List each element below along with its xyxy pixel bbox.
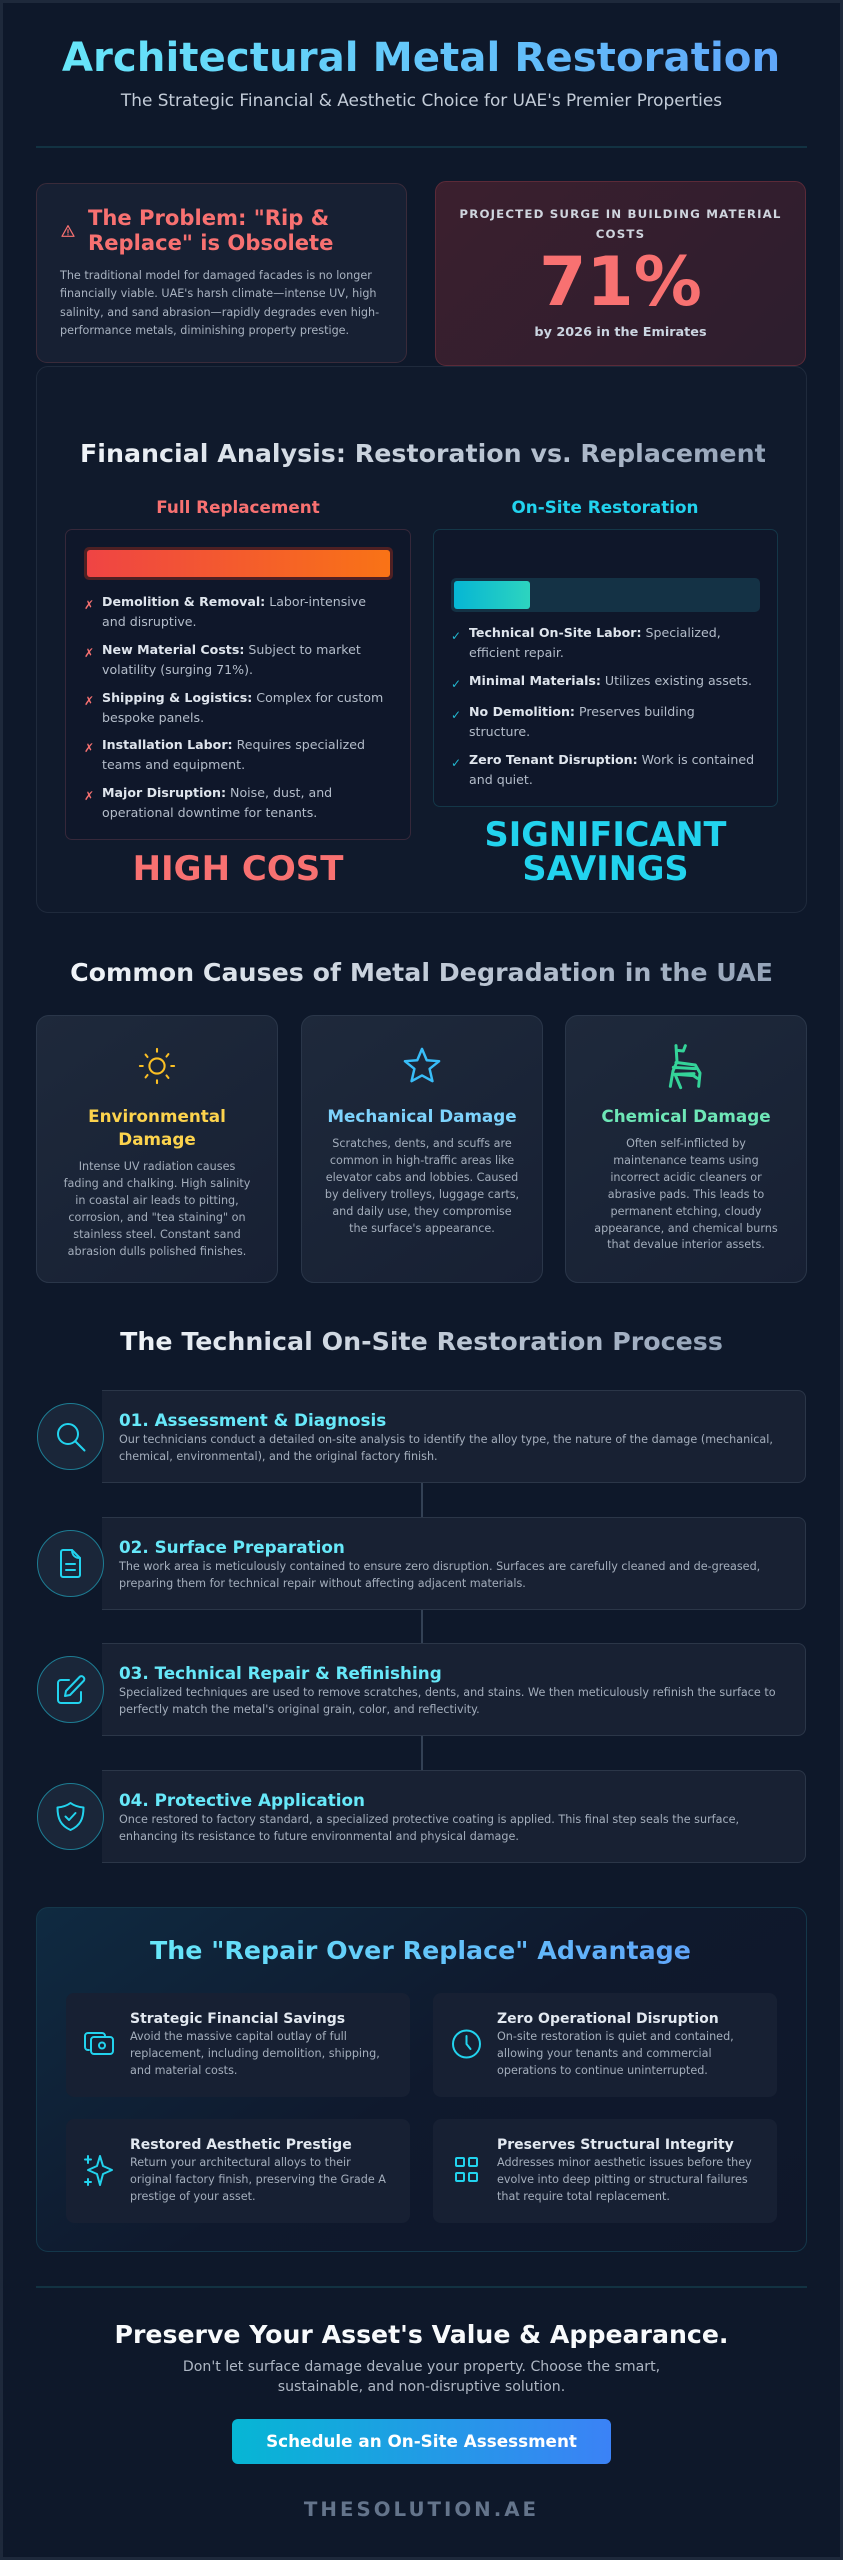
icon: sparkles xyxy=(84,2155,113,2186)
advantage: structural integrity xyxy=(433,2119,777,2223)
step 4 text: Once restored to factory standard, a specialized protective coating is applied. This final step seals the surface, xyxy=(119,1813,739,1826)
item: new material xyxy=(102,642,361,677)
heading: restoration process: The Technical On-Site Restoration Process xyxy=(120,1327,723,1356)
cost bar fill xyxy=(87,550,390,577)
advantage title: Restored Aesthetic Prestige xyxy=(130,2137,352,2153)
card text xyxy=(325,1137,519,1235)
mark: ✓ xyxy=(451,629,461,643)
call to action button xyxy=(232,2419,611,2464)
savings list xyxy=(451,625,754,787)
card text: Intense UV radiation causes xyxy=(79,1160,235,1173)
mark: ✗ xyxy=(84,789,94,803)
item: demolition: and disruptive. xyxy=(102,614,197,629)
advantage text: operations to continue uninterrupted. xyxy=(497,2064,708,2077)
icon: sun xyxy=(138,1048,176,1084)
item: shipping xyxy=(102,690,383,725)
panel: the problem xyxy=(36,183,407,363)
item: materials: Minimal Materials: Utilizes existing assets. xyxy=(469,673,752,688)
card text: by delivery trolleys, luggage carts, xyxy=(325,1188,519,1201)
advantage text: Addresses minor aesthetic issues before they xyxy=(497,2156,752,2169)
item: demolition: structure. xyxy=(469,724,530,739)
card text: that devalue interior assets. xyxy=(607,1238,765,1251)
mark: ✓ xyxy=(451,708,461,722)
card text: and daily use, they compromise xyxy=(332,1205,512,1218)
step 2 text xyxy=(118,1560,760,1590)
card text: appearance, and chemical burns xyxy=(594,1222,778,1235)
stat note: by 2026 in the Emirates xyxy=(534,325,707,340)
step 3 text xyxy=(119,1686,776,1716)
advantage: financial savings xyxy=(66,1993,410,2097)
advantage text: allowing your tenants and commercial xyxy=(497,2047,712,2060)
card text: abrasion dulls polished finishes. xyxy=(68,1245,246,1258)
step 1 text xyxy=(119,1433,773,1463)
step 2 text: The work area is meticulously contained to ensure zero disruption. Surfaces are carefully cleaned and de-greased, xyxy=(119,1560,760,1573)
brand name: THESOLUTION.AE xyxy=(304,2498,539,2521)
card text: common in high-traffic areas like xyxy=(330,1154,514,1167)
advantage title: Strategic Financial Savings xyxy=(130,2011,345,2027)
advantage title: Preserves Structural Integrity xyxy=(497,2137,734,2153)
icon: warning triangle xyxy=(61,225,75,237)
cost list xyxy=(84,594,383,820)
card text: fading and chalking. High salinity xyxy=(64,1177,250,1190)
call to action button: Schedule an On-Site Assessment xyxy=(266,2431,577,2451)
item: new material: New Material Costs: Subject to market xyxy=(102,642,361,657)
heading: the problem: Replace" is Obsolete xyxy=(88,230,333,255)
card text: permanent etching, cloudy xyxy=(610,1205,762,1218)
verdict: significant savings: SIGNIFICANT xyxy=(485,815,726,854)
card text: abrasive pads. This leads to xyxy=(608,1188,764,1201)
column title: on-site restoration: On-Site Restoration xyxy=(512,497,698,517)
problem description: financially viable. UAE's harsh climate—intense UV, high xyxy=(60,287,377,300)
card: chemical damage xyxy=(565,1015,807,1283)
advantage text: evolve into deep pitting or structural failures xyxy=(497,2173,748,2186)
advantage text xyxy=(130,2030,380,2077)
step 1 box xyxy=(102,1390,806,1483)
mark: ✗ xyxy=(84,694,94,708)
step 2 box xyxy=(102,1517,806,1610)
problem description: salinity, and sand abrasion—rapidly degrades even high- xyxy=(60,306,379,319)
card title: Chemical Damage xyxy=(601,1106,771,1126)
cost bar: full xyxy=(84,547,393,580)
item: shipping: Shipping & Logistics: Complex for custom xyxy=(102,690,383,705)
item: disruption: operational downtime for tenants. xyxy=(102,805,317,820)
heading: the problem: The Problem: "Rip & xyxy=(88,205,329,230)
item: demolition xyxy=(102,594,366,629)
step 3 text: perfectly match the metal's original grain, color, and reflectivity. xyxy=(119,1703,480,1716)
cost bar fill xyxy=(454,581,530,609)
item: shipping: bespoke panels. xyxy=(102,710,204,725)
heading: the problem xyxy=(88,205,333,255)
item: installation: Installation Labor: Requires specialized xyxy=(102,737,365,752)
verdict: significant savings xyxy=(485,815,726,888)
card text: maintenance teams using xyxy=(613,1154,759,1167)
item: tenant xyxy=(469,752,754,787)
item: installation xyxy=(102,737,365,772)
problem description: performance metals, diminishing property prestige. xyxy=(60,324,349,337)
advantage text: prestige of your asset. xyxy=(130,2190,256,2203)
mark: ✗ xyxy=(84,646,94,660)
subtitle: The Strategic Financial & Aesthetic Choice for UAE's Premier Properties xyxy=(121,90,722,110)
item: disruption: Major Disruption: Noise, dust, and xyxy=(102,785,332,800)
footer text xyxy=(183,2359,660,2394)
panel: financial analysis xyxy=(36,366,807,913)
step 1 title: 01. Assessment & Diagnosis xyxy=(119,1410,386,1430)
advantage text xyxy=(497,2030,734,2077)
item: labor xyxy=(469,625,721,660)
advantage text: replacement, including demolition, shipping, xyxy=(130,2047,380,2060)
column: full replacement xyxy=(65,529,411,840)
mark: ✓ xyxy=(451,756,461,770)
step 2 title: 02. Surface Preparation xyxy=(119,1537,345,1557)
step 3 text: Specialized techniques are used to remove scratches, dents, and stains. We then meticulously refinish the surface to xyxy=(119,1686,776,1699)
card title: Mechanical Damage xyxy=(327,1106,517,1126)
advantage text xyxy=(497,2156,752,2203)
icon: squares grid xyxy=(455,2157,478,2182)
item: installation: teams and equipment. xyxy=(102,757,245,772)
card title: Environmental xyxy=(88,1106,226,1126)
step 1 text: Our technicians conduct a detailed on-site analysis to identify the alloy type, the nature of the damage (mechanical, xyxy=(119,1433,773,1446)
heading: advantage: The "Repair Over Replace" Advantage xyxy=(150,1936,691,1965)
advantage: aesthetic prestige xyxy=(66,2119,410,2223)
advantage text: On-site restoration is quiet and contained, xyxy=(497,2030,734,2043)
advantage text: Avoid the massive capital outlay of full xyxy=(130,2030,347,2043)
item: labor: efficient repair. xyxy=(469,645,564,660)
column title: full replacement: Full Replacement xyxy=(156,497,320,517)
verdict: high cost: HIGH COST xyxy=(133,849,343,889)
icon: shield check xyxy=(37,1783,104,1850)
advantage text: Return your architectural alloys to their xyxy=(130,2156,351,2169)
advantage text: that require total replacement. xyxy=(497,2190,670,2203)
step 4 text xyxy=(119,1813,739,1843)
item: labor: Technical On-Site Labor: Specialized, xyxy=(469,625,721,640)
item: demolition: Demolition & Removal: Labor-intensive xyxy=(102,594,366,609)
card: environmental damage xyxy=(36,1015,278,1283)
advantage text: and material costs. xyxy=(130,2064,237,2077)
mark: ✗ xyxy=(84,741,94,755)
item: disruption xyxy=(102,785,332,820)
step 2 text: preparing them for technical repair without affecting adjacent materials. xyxy=(119,1577,526,1590)
item: demolition xyxy=(469,704,695,739)
footer text: sustainable, and non-disruptive solution. xyxy=(278,2378,565,2394)
advantage: zero disruption xyxy=(433,1993,777,2097)
step 4 box xyxy=(102,1770,806,1863)
stat label: PROJECTED SURGE IN BUILDING MATERIAL xyxy=(459,207,782,221)
icon: clock xyxy=(452,2030,481,2058)
card text: Scratches, dents, and scuffs are xyxy=(332,1137,512,1150)
column: on-site restoration xyxy=(433,529,778,807)
footer text: Don't let surface damage devalue your property. Choose the smart, xyxy=(183,2359,660,2375)
verdict: significant savings: SAVINGS xyxy=(522,849,689,888)
step 4 text: enhancing its resistance to future environmental and physical damage. xyxy=(119,1830,519,1843)
card text: the surface's appearance. xyxy=(349,1222,495,1235)
panel: repair over replace advantage xyxy=(36,1907,807,2252)
icon: chemical glyph xyxy=(668,1044,702,1090)
icon: cash xyxy=(84,2032,114,2055)
icon: pencil square xyxy=(37,1656,104,1723)
card title: Damage xyxy=(118,1129,196,1149)
card: mechanical damage xyxy=(301,1015,543,1283)
card text: elevator cabs and lobbies. Caused xyxy=(326,1171,518,1184)
card text: incorrect acidic cleaners or xyxy=(610,1171,762,1184)
step 1 text: chemical, environmental), and the original factory finish. xyxy=(119,1450,438,1463)
advantage text: original factory finish, preserving the Grade A xyxy=(130,2173,386,2186)
step 3 box xyxy=(102,1643,806,1736)
card text: Often self-inflicted by xyxy=(626,1137,746,1150)
icon: document xyxy=(37,1530,104,1597)
card text xyxy=(594,1137,778,1251)
stat label: COSTS xyxy=(596,227,645,241)
icon: search xyxy=(37,1403,104,1470)
stat value: 71% xyxy=(539,243,702,322)
card text: corrosion, and "tea staining" on xyxy=(68,1211,246,1224)
panel: 71% statistic xyxy=(435,181,806,366)
icon: star xyxy=(404,1048,440,1082)
step 4 title: 04. Protective Application xyxy=(119,1790,365,1810)
problem description: The traditional model for damaged facades is no longer xyxy=(60,269,372,282)
card text: in coastal air leads to pitting, xyxy=(75,1194,239,1207)
advantage title: Zero Operational Disruption xyxy=(497,2011,719,2027)
card text: stainless steel. Constant sand xyxy=(73,1228,241,1241)
card title xyxy=(88,1106,226,1149)
card text xyxy=(64,1160,250,1258)
item: new material: volatility (surging 71%). xyxy=(102,662,253,677)
heading: financial analysis: Financial Analysis: Restoration vs. Replacement xyxy=(80,439,767,468)
step 3 title: 03. Technical Repair & Refinishing xyxy=(119,1663,442,1683)
mark: ✓ xyxy=(451,677,461,691)
problem description xyxy=(60,269,379,337)
item: tenant: Zero Tenant Disruption: Work is contained xyxy=(469,752,754,767)
heading: common causes: Common Causes of Metal Degradation in the UAE xyxy=(70,958,773,987)
title: Architectural Metal Restoration xyxy=(62,34,780,81)
item: demolition: No Demolition: Preserves building xyxy=(469,704,695,719)
mark: ✗ xyxy=(84,598,94,612)
item: tenant: and quiet. xyxy=(469,772,533,787)
cost bar: restoration xyxy=(451,578,760,612)
advantage text xyxy=(130,2156,386,2203)
stat label xyxy=(459,207,782,241)
footer heading: Preserve Your Asset's Value & Appearance. xyxy=(114,2320,728,2349)
